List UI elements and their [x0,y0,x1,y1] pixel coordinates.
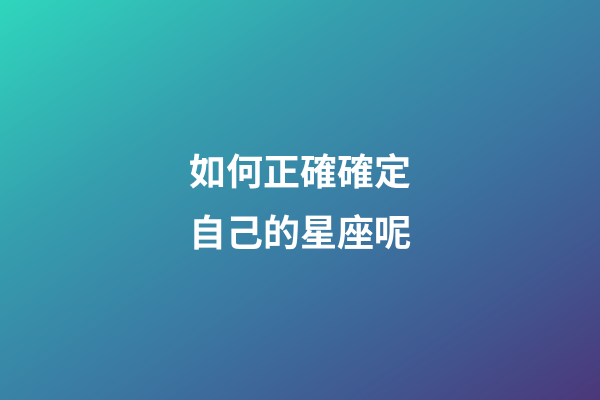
title [189,152,411,254]
title: 自己的星座呢 [189,213,411,254]
title: 如何正確確定 [189,152,411,193]
